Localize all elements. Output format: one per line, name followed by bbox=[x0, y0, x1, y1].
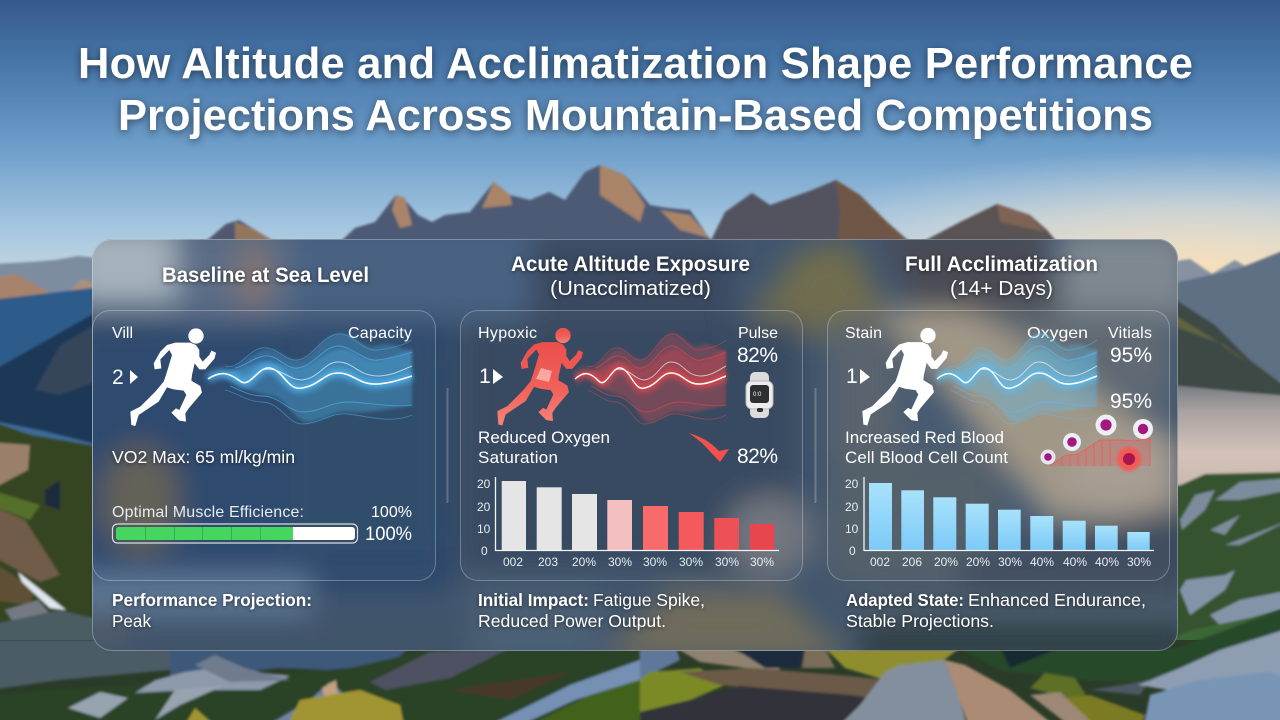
oxygen wave bbox=[937, 333, 1097, 424]
label: vitials: Vitials bbox=[1108, 325, 1152, 342]
arrow: downward trend bbox=[689, 433, 729, 462]
heading: acute: Acute Altitude Exposure bbox=[511, 253, 750, 276]
icon: smartwatch bbox=[746, 372, 773, 418]
value: pulse: 82% bbox=[737, 344, 778, 367]
title: How Altitude and Acclimatization Shape Performance bbox=[78, 40, 1193, 88]
bar chart: saturation decline: 203 bbox=[538, 555, 558, 569]
bar chart: red cell increase: 206 bbox=[902, 555, 922, 569]
bar chart: saturation decline: 20 bbox=[477, 500, 491, 514]
label: stain: Stain bbox=[845, 325, 882, 342]
icon: white runner bbox=[862, 328, 948, 425]
caption: baseline projection: Peak bbox=[112, 611, 151, 631]
heading: acute: (Unacclimatized) bbox=[550, 277, 711, 300]
label: pulse: Pulse bbox=[738, 325, 778, 342]
bar chart: saturation decline: 002 bbox=[503, 555, 523, 569]
title: Projections Across Mountain-Based Competitions bbox=[118, 92, 1153, 140]
bar chart: red cell increase: 10 bbox=[845, 522, 859, 536]
stage number bbox=[846, 365, 870, 388]
caption: initial impact: Initial Impact: bbox=[478, 590, 589, 610]
right side landscape bbox=[1170, 248, 1280, 665]
caption: adapted state: Enhanced Endurance, bbox=[968, 590, 1146, 610]
bar chart: red cell increase: 30% bbox=[998, 555, 1022, 569]
bar chart: saturation decline: 0 bbox=[481, 544, 488, 558]
label: red blood cell count: Cell Blood Cell Count bbox=[845, 448, 1008, 467]
value: efficiency top: 100% bbox=[371, 504, 412, 521]
label: reduced oxygen saturation bbox=[478, 428, 610, 467]
caption: initial impact: Reduced Power Output. bbox=[478, 611, 666, 631]
label: red blood cell count bbox=[845, 428, 1008, 467]
bar chart: saturation decline: 30% bbox=[750, 555, 774, 569]
label: reduced oxygen saturation: Reduced Oxygen bbox=[478, 428, 610, 447]
icon: smartwatch: 0:0 bbox=[753, 392, 762, 398]
label: vill: Vill bbox=[112, 325, 133, 342]
caption: adapted state: Stable Projections. bbox=[846, 611, 994, 631]
label: oxygen: Oxygen bbox=[1027, 325, 1088, 342]
icon: red runner bbox=[497, 328, 583, 425]
caption: initial impact: Fatigue Spike, bbox=[593, 590, 705, 610]
label: reduced oxygen saturation: Saturation bbox=[478, 448, 558, 467]
stage number bbox=[479, 365, 503, 388]
bar chart: saturation decline bbox=[477, 477, 779, 569]
stage number: 1 bbox=[846, 365, 858, 388]
oxygen wave bbox=[208, 333, 412, 424]
heading: full acclimatization: (14+ Days) bbox=[950, 277, 1053, 300]
stage number bbox=[112, 366, 138, 389]
icon: white runner bbox=[130, 328, 216, 426]
icon: blood cells chart bbox=[1040, 414, 1153, 471]
caption: baseline projection: Performance Projection: bbox=[112, 590, 312, 610]
value: efficiency bar: 100% bbox=[365, 523, 412, 545]
label: capacity: Capacity bbox=[348, 325, 412, 342]
panel: baseline card bbox=[92, 310, 436, 581]
bar chart: red cell increase: 40% bbox=[1095, 555, 1119, 569]
heading: baseline: Baseline at Sea Level bbox=[162, 264, 369, 287]
bar chart: saturation decline: 20 bbox=[477, 477, 491, 491]
bar chart: red cell increase: 20% bbox=[934, 555, 958, 569]
panel: acute card bbox=[460, 310, 803, 581]
label: red blood cell count: Increased Red Blood bbox=[845, 428, 1004, 447]
bar chart: red cell increase: 002 bbox=[870, 555, 890, 569]
progress bar bbox=[112, 524, 358, 543]
bar chart: red cell increase: 40% bbox=[1063, 555, 1087, 569]
far peaks bbox=[205, 165, 1057, 242]
value: saturation: 82% bbox=[737, 445, 778, 468]
bar chart: saturation decline: 30% bbox=[715, 555, 739, 569]
label: muscle efficiency: Optimal Muscle Efficience: bbox=[112, 504, 304, 521]
heading: full acclimatization: Full Acclimatization bbox=[905, 253, 1098, 276]
bar chart: saturation decline: 30% bbox=[679, 555, 703, 569]
bar chart: saturation decline: 30% bbox=[608, 555, 632, 569]
frosted interior of the main panel bbox=[70, 225, 1190, 660]
hypoxic wave bbox=[575, 333, 726, 424]
bar chart: red cell increase: 20 bbox=[845, 500, 859, 514]
bar chart: red cell increase bbox=[845, 477, 1154, 569]
value: vitals: 95% bbox=[1110, 344, 1152, 367]
metric: VO2 max: VO2 Max: 65 ml/kg/min bbox=[112, 447, 295, 467]
panel: stages container bbox=[92, 239, 1178, 651]
caption: adapted state: Adapted State: bbox=[846, 590, 964, 610]
bar chart: red cell increase: 40% bbox=[1030, 555, 1054, 569]
bar chart: red cell increase: 20% bbox=[966, 555, 990, 569]
bar chart: saturation decline: 30% bbox=[643, 555, 667, 569]
shared symbols bbox=[92, 239, 94, 241]
stage number: 2 bbox=[112, 366, 124, 389]
bar chart: red cell increase: 30% bbox=[1127, 555, 1151, 569]
bar chart: saturation decline: 10 bbox=[477, 522, 491, 536]
stage number: 1 bbox=[479, 365, 491, 388]
left side landscape bbox=[0, 256, 100, 690]
label: hypoxic: Hypoxic bbox=[478, 325, 537, 342]
bar chart: red cell increase: 0 bbox=[849, 544, 856, 558]
foreground terrain bbox=[0, 640, 1280, 720]
bar chart: saturation decline: 20% bbox=[572, 555, 596, 569]
bar chart: red cell increase: 20 bbox=[845, 477, 859, 491]
panel: acclimatization card bbox=[827, 310, 1170, 581]
value: oxygen: 95% bbox=[1110, 390, 1152, 413]
